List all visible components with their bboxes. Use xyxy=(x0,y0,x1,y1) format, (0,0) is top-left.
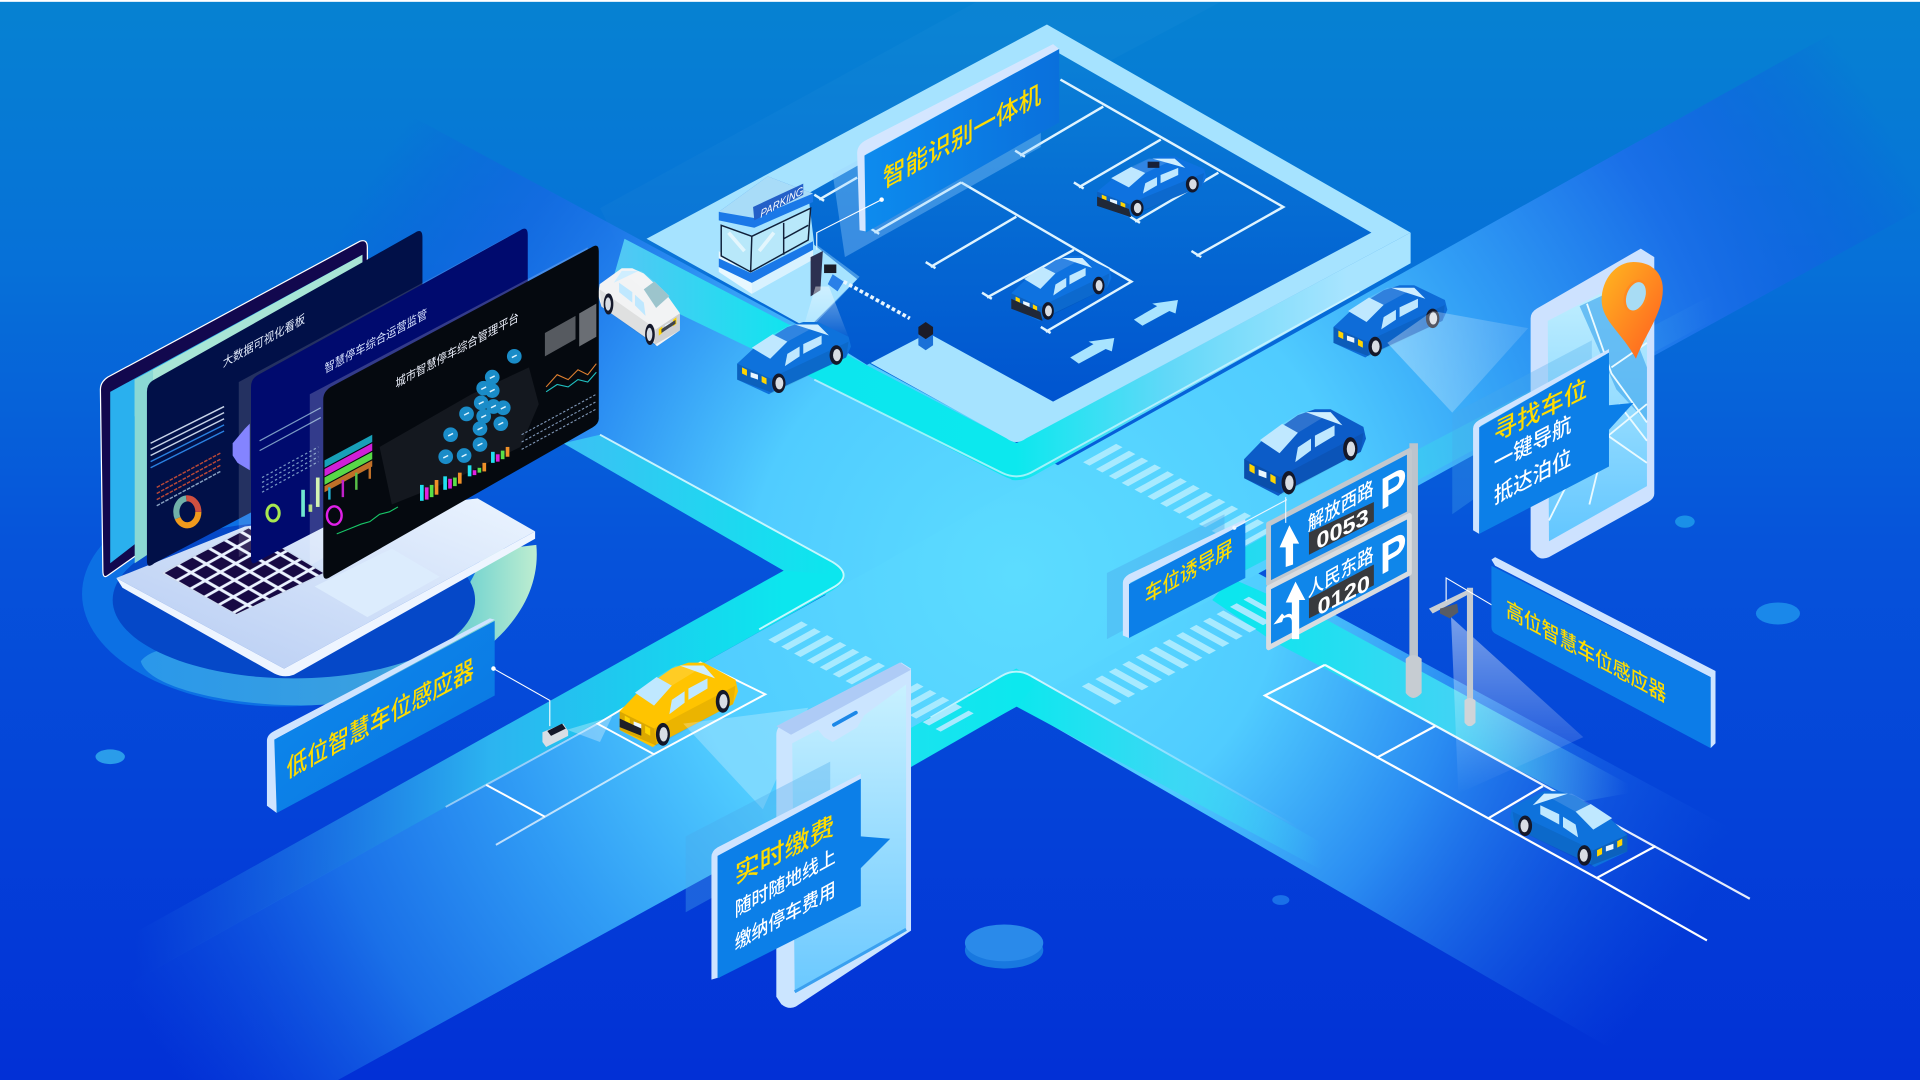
sign text: 人民东路 xyxy=(1308,543,1374,603)
panel text: 随时随地线上 xyxy=(735,845,836,922)
dashboard panel: big data xyxy=(147,231,422,566)
car: upper right road xyxy=(1333,285,1447,358)
road sign boxes xyxy=(1309,502,1374,555)
callout line: guidance screen xyxy=(1233,497,1287,529)
car parked: taxi xyxy=(1097,157,1206,217)
translucent layer xyxy=(239,233,516,557)
laptop base xyxy=(116,498,535,669)
parking spots lower left xyxy=(446,662,765,845)
parking letter: P xyxy=(1380,457,1406,520)
road sign xyxy=(1269,443,1422,698)
keyboard xyxy=(162,528,324,615)
map markers xyxy=(438,349,522,464)
curb: below top parking lot xyxy=(612,239,1016,480)
parking lines left xyxy=(814,178,1131,333)
sign text: 低位智慧车位感应器 xyxy=(287,654,474,785)
parking booth xyxy=(719,176,813,294)
parking letter: P xyxy=(1380,522,1406,585)
screen content xyxy=(110,255,362,563)
bars xyxy=(301,478,320,517)
panel: realtime payment xyxy=(686,762,890,980)
sign text: 高位智慧车位感应器 xyxy=(1506,597,1666,708)
translucent layer xyxy=(310,247,588,566)
car parked: sedan xyxy=(1011,256,1111,321)
lot asphalt xyxy=(808,53,1371,402)
curb: bottom block left xyxy=(686,669,1035,896)
navigation map xyxy=(1548,269,1647,541)
dashboard panel: operations xyxy=(233,229,528,563)
curb: right block SE xyxy=(1212,578,1641,802)
lot light border xyxy=(647,24,1411,442)
top parking lot xyxy=(647,24,1411,442)
dashboard title: 智慧停车综合运营监管 xyxy=(324,305,427,377)
curb: upper left road edge xyxy=(563,435,845,576)
low sensor xyxy=(542,716,612,747)
floating base dots xyxy=(96,516,1800,969)
beam: car to phone xyxy=(1387,311,1528,413)
upper panel xyxy=(1269,451,1409,584)
panel text: 缴纳停车费用 xyxy=(735,878,836,955)
panel text: 一键导航 xyxy=(1494,411,1571,476)
photo thumbnails xyxy=(545,316,576,356)
donut chart xyxy=(327,506,342,525)
phone: payment xyxy=(776,662,911,1008)
map xyxy=(380,367,539,504)
crosswalk lower right xyxy=(1098,606,1265,696)
line charts xyxy=(337,364,596,534)
color bands xyxy=(324,435,372,492)
beam: gate camera to car xyxy=(803,287,850,340)
curb: bottom block right xyxy=(967,669,1518,955)
panel heading: 寻找车位 xyxy=(1494,374,1587,448)
beam: yellow car to phone xyxy=(683,708,808,809)
dashboard title: 大数据可视化看板 xyxy=(223,310,305,370)
sign number: 0053 xyxy=(1316,504,1369,555)
sign text: 解放西路 xyxy=(1308,477,1374,537)
car: yellow xyxy=(620,663,738,747)
gate machine xyxy=(796,245,933,350)
lamp post xyxy=(1429,588,1583,793)
trackpad xyxy=(315,549,440,617)
car: white van xyxy=(598,268,680,346)
location pin xyxy=(1602,262,1663,359)
rings under laptop xyxy=(82,481,537,707)
booth text: PARKING xyxy=(760,184,804,221)
parking lines right xyxy=(1015,80,1283,257)
callout line: low sensor xyxy=(492,667,550,726)
callout line: high sensor xyxy=(1446,578,1502,611)
laptop screen frame xyxy=(100,241,367,577)
laptop xyxy=(82,229,599,707)
phone: navigation xyxy=(1531,249,1663,559)
parking spots lower right xyxy=(1265,665,1750,940)
dashboard title: 城市智慧停车综合管理平台 xyxy=(396,308,519,391)
sign text: 车位诱导屏 xyxy=(1145,536,1233,609)
car: parked lower right xyxy=(1510,791,1627,867)
lower panel xyxy=(1269,516,1409,648)
sign: low sensor xyxy=(267,618,495,813)
panel: find a space xyxy=(1452,340,1633,534)
donut chart xyxy=(176,498,198,525)
panel text: 抵达泊位 xyxy=(1494,444,1571,510)
curb: right of top parking lot xyxy=(1011,233,1411,480)
panel heading: 实时缴费 xyxy=(735,811,834,890)
sign: smart recognition xyxy=(833,44,1059,257)
lane arrows xyxy=(1070,300,1178,364)
curb: right block NE xyxy=(1212,294,1739,578)
callout line: gate to sign xyxy=(817,198,883,250)
sign text: 智能识别一体机 xyxy=(883,79,1041,195)
dashboard panel: city platform xyxy=(323,246,599,579)
phone screen xyxy=(792,684,906,992)
donut chart xyxy=(267,505,279,521)
car at gate xyxy=(737,322,851,394)
light beam xyxy=(1451,617,1583,793)
sign pole xyxy=(1406,443,1422,698)
sign number: 0120 xyxy=(1318,570,1370,621)
sign: guidance screen xyxy=(1107,514,1245,639)
car: on road near sign xyxy=(1244,409,1366,496)
crosswalk lower left xyxy=(785,631,957,722)
curb: lower left road edge xyxy=(110,561,845,994)
sign: high sensor xyxy=(1491,557,1716,748)
crosswalk upper right xyxy=(1100,453,1259,538)
road edge lines xyxy=(600,291,1359,828)
bar charts xyxy=(328,447,509,501)
arrows xyxy=(1280,525,1299,567)
